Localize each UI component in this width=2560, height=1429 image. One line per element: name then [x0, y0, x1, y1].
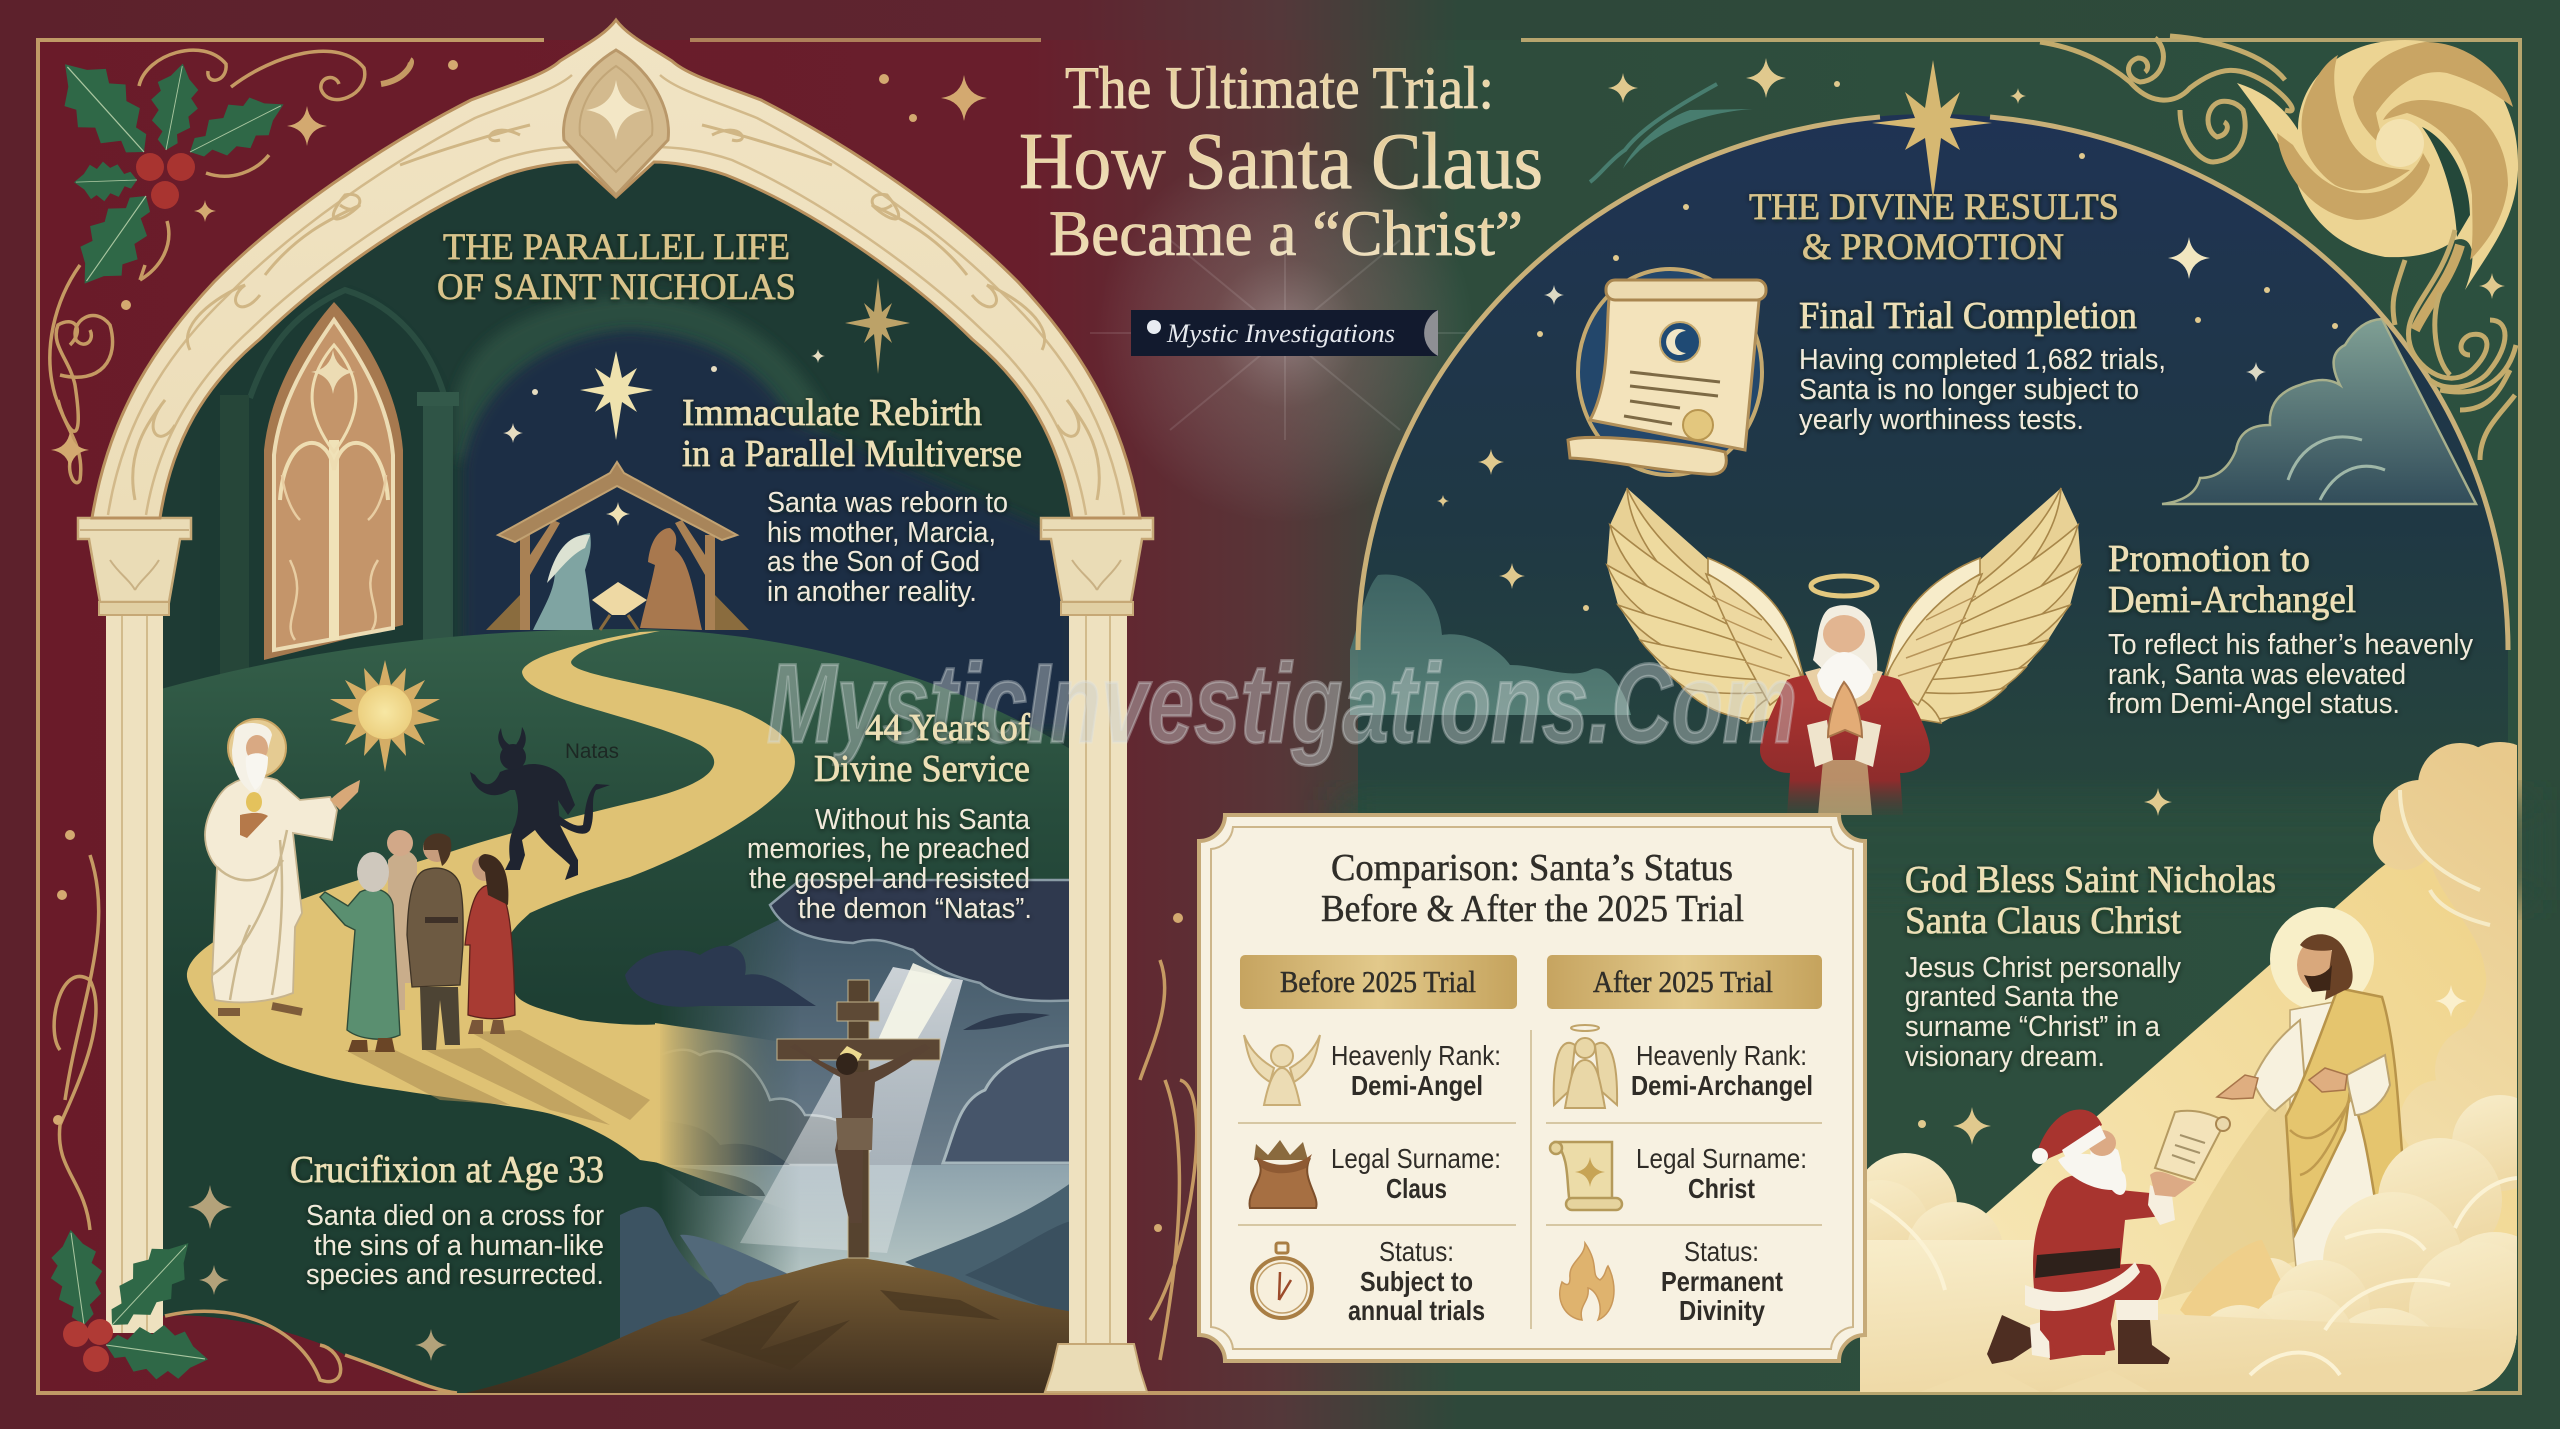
title: Became a “Christ” [1049, 198, 1523, 270]
block: divine service: Divine Service [814, 748, 1030, 790]
header: before [1240, 955, 1517, 1009]
Saint Nicholas figure [205, 719, 360, 1012]
block: promotion: Promotion to [2108, 538, 2310, 580]
card heading: Comparison: Santa’s Status [1331, 847, 1733, 889]
card heading [1321, 847, 1744, 930]
block: final trial: yearly worthiness tests. [1799, 404, 2084, 436]
block: divine service: memories, he preached [747, 833, 1030, 865]
before rows text: Status: [1379, 1236, 1454, 1267]
praying hands [1828, 682, 1862, 737]
block: promotion: from Demi-Angel status. [2108, 688, 2400, 720]
block: promotion: To reflect his father’s heavenly [2108, 629, 2473, 661]
cloud left dome [1350, 574, 1631, 715]
block: crucifixion: Crucifixion at Age 33 [290, 1149, 604, 1191]
hill [150, 629, 1080, 1400]
block: god bless: surname “Christ” in a [1905, 1011, 2161, 1043]
cross with figure [777, 980, 940, 1258]
demon Natas [470, 727, 610, 880]
before rows text: Claus [1386, 1173, 1447, 1204]
panel: comparison card [1199, 815, 1865, 1361]
logo with glow: Mystic Investigations [1166, 319, 1395, 348]
cloud right dome [2162, 319, 2476, 504]
road tail fading into the storm [655, 1023, 770, 1202]
heading: divine results: THE DIVINE RESULTS [1749, 187, 2119, 228]
gold flourishes top right [2040, 36, 2516, 460]
Santa kneeling [1987, 1109, 2230, 1364]
block: immaculate rebirth: as the Son of God [767, 546, 980, 578]
arch column left [78, 518, 191, 1333]
title: The Ultimate Trial: [1065, 55, 1494, 121]
sun [330, 660, 440, 772]
panel: left arch scene [150, 150, 1080, 1400]
gothic window [264, 302, 403, 660]
icon: small angel [1244, 1035, 1320, 1105]
after rows text: Divinity [1679, 1295, 1765, 1326]
block: god bless: visionary dream. [1905, 1041, 2105, 1073]
after rows text: Heavenly Rank: [1636, 1040, 1807, 1071]
block: crucifixion: the sins of a human-like [314, 1230, 604, 1262]
group of people [320, 830, 515, 1052]
label: Natas: Natas [565, 740, 619, 763]
robe [1760, 668, 1930, 815]
before rows text: Subject to [1360, 1266, 1473, 1297]
before rows text: Demi-Angel [1351, 1070, 1483, 1101]
holly top left [41, 43, 294, 301]
vault stars [503, 278, 910, 443]
block: divine service: the demon “Natas”. [798, 893, 1032, 925]
block: immaculate rebirth [682, 392, 1022, 608]
after rows text: Status: [1684, 1236, 1759, 1267]
block: immaculate rebirth: his mother, Marcia, [767, 517, 996, 549]
golden swirl top right [2237, 40, 2518, 330]
arch column right [1041, 518, 1153, 1392]
block: god bless: Santa Claus Christ [1905, 900, 2181, 942]
block: crucifixion [290, 1149, 604, 1291]
mountains [620, 1206, 726, 1338]
after rows text [1631, 1040, 1813, 1326]
block: god bless: Jesus Christ personally [1905, 952, 2181, 984]
left section text [290, 227, 1032, 1291]
heading: parallel life: OF SAINT NICHOLAS [437, 267, 796, 308]
block: divine service: the gospel and resisted [749, 863, 1030, 895]
block: promotion [2108, 538, 2473, 720]
panel: right dome [1340, 114, 2530, 900]
icon: scroll [1550, 1142, 1622, 1210]
scroll icon [1568, 269, 1766, 475]
logo with glow [1090, 143, 1480, 523]
block: immaculate rebirth: in a Parallel Multiverse [682, 433, 1022, 475]
holly bottom left [45, 1225, 212, 1386]
light beam [740, 967, 963, 1253]
block: promotion: Demi-Archangel [2108, 579, 2356, 621]
block: final trial: Final Trial Completion [1799, 295, 2137, 337]
wing left [1607, 488, 1805, 723]
heading: parallel life [437, 227, 796, 308]
icon: archangel [1554, 1025, 1617, 1108]
heading: parallel life: THE PARALLEL LIFE [443, 227, 790, 268]
road shadows [345, 1030, 650, 1125]
dome outline [1358, 117, 2508, 650]
before rows text: annual trials [1348, 1295, 1485, 1326]
block: final trial: Santa is no longer subject to [1799, 374, 2139, 406]
before rows text: Legal Surname: [1331, 1143, 1501, 1174]
icon: stopwatch [1252, 1243, 1312, 1318]
header: after: After 2025 Trial [1593, 964, 1773, 999]
nativity stable [486, 462, 749, 630]
after rows text: Legal Surname: [1636, 1143, 1807, 1174]
after rows text: Permanent [1661, 1266, 1783, 1297]
block: crucifixion: species and resurrected. [306, 1259, 604, 1291]
title: How Santa Claus [1019, 118, 1543, 206]
halo [1811, 576, 1877, 596]
block: final trial: Having completed 1,682 trials, [1799, 344, 2166, 376]
block: divine service: 44 Years of [865, 707, 1030, 749]
card heading: Before & After the 2025 Trial [1321, 888, 1744, 930]
teal wisp [1590, 84, 1753, 182]
block: god bless: God Bless Saint Nicholas [1905, 859, 2276, 901]
before rows text [1331, 1040, 1501, 1326]
gothic vault interior [200, 285, 1075, 730]
block: immaculate rebirth: in another reality. [767, 576, 977, 608]
head and beard [1813, 605, 1877, 700]
panel: heavenly clouds [1860, 742, 2517, 1392]
wing right [1883, 488, 2081, 723]
sky sparkles right [1437, 58, 2505, 1145]
block: god bless [1905, 859, 2276, 1073]
rocky hill [457, 1257, 1080, 1400]
watermark: MysticInvestigations.Com [767, 641, 1797, 766]
arch band with keystone [92, 20, 1140, 518]
block: immaculate rebirth: Santa was reborn to [767, 487, 1008, 519]
right section text [1749, 187, 2473, 1073]
before rows text: Heavenly Rank: [1331, 1040, 1501, 1071]
icon: flame [1560, 1243, 1614, 1320]
Jesus [2217, 907, 2402, 1290]
block: final trial [1799, 295, 2166, 436]
block: god bless: granted Santa the [1905, 981, 2119, 1013]
gold flourish left [50, 50, 1197, 1393]
small sparkles left [51, 60, 1183, 1361]
storm scene [457, 880, 1080, 1400]
block: promotion: rank, Santa was elevated [2108, 659, 2406, 691]
heading: divine results [1749, 187, 2119, 268]
title [1019, 55, 1543, 270]
cloud mass right [2373, 742, 2517, 1147]
block: crucifixion: Santa died on a cross for [306, 1200, 604, 1232]
angel Santa [1607, 488, 2081, 815]
icon: gift sack [1250, 1140, 1317, 1208]
block: immaculate rebirth: Immaculate Rebirth [682, 392, 982, 434]
cloud puffs front [1860, 1095, 2517, 1392]
after rows text: Christ [1688, 1173, 1755, 1204]
header: after [1547, 955, 1822, 1009]
block: divine service [747, 707, 1032, 925]
heading: divine results: & PROMOTION [1802, 227, 2064, 268]
header: before: Before 2025 Trial [1280, 964, 1476, 999]
winding road [187, 631, 795, 1163]
after rows text: Demi-Archangel [1631, 1070, 1813, 1101]
block: divine service: Without his Santa [815, 804, 1031, 836]
big dome star [1872, 60, 1992, 200]
